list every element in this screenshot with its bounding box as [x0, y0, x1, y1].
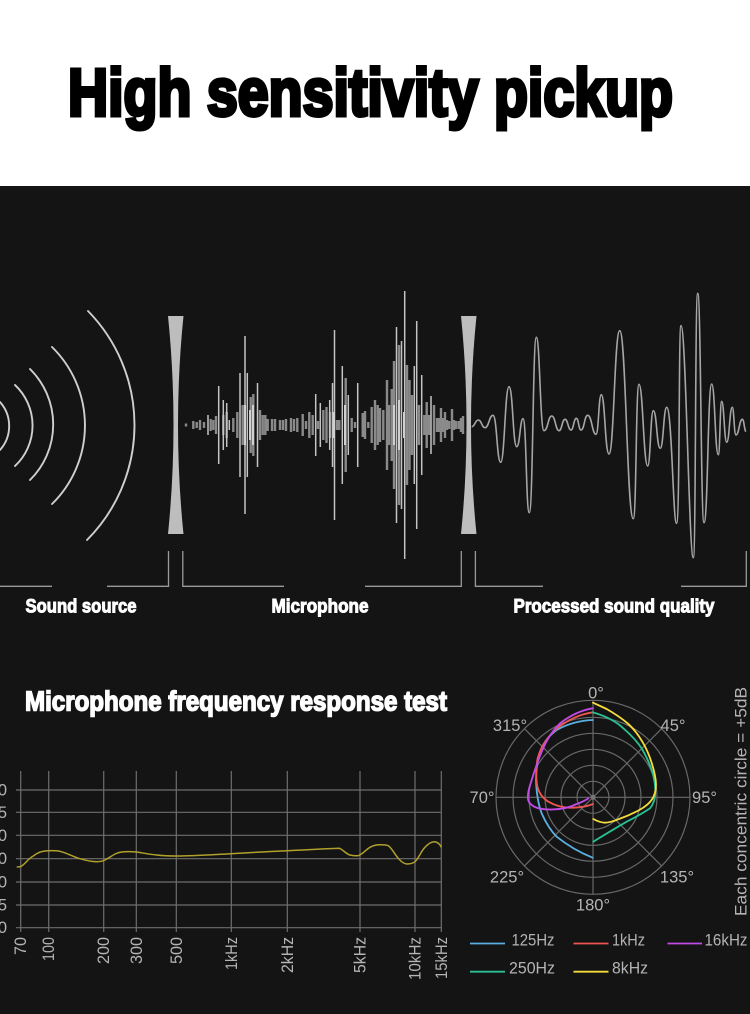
- polar angle labels: 135°: [660, 868, 694, 886]
- polar angle labels: 225°: [490, 868, 524, 886]
- y axis labels: [0, 782, 7, 937]
- polar angle labels: 70°: [470, 789, 494, 807]
- x axis labels: 70: [12, 937, 30, 955]
- bracket: sound source: [0, 551, 168, 586]
- x axis labels: 15kHz: [433, 937, 451, 979]
- polar angle labels: 95°: [692, 789, 717, 807]
- x axis labels: 10kHz: [406, 937, 424, 980]
- polar scale note: Each concentric circle = +5dB: [732, 687, 750, 916]
- label: microphone: Microphone: [272, 595, 369, 617]
- processed sound wave: [472, 293, 746, 558]
- x axis labels: 300: [128, 937, 146, 964]
- bracket: microphone: [183, 551, 461, 586]
- chart: frequency response: [0, 771, 451, 980]
- x axis labels: [12, 937, 451, 980]
- legend: 8kHz: [612, 960, 648, 978]
- raw sound waveform: [186, 291, 463, 559]
- legend: 250Hz: [509, 960, 555, 978]
- response curve: [17, 842, 441, 867]
- x axis labels: 100: [40, 937, 58, 961]
- x axis labels: 1kHz: [223, 937, 241, 970]
- x axis labels: 2kHz: [279, 937, 297, 973]
- legend: [470, 932, 748, 978]
- legend: 16kHz: [704, 932, 748, 950]
- polar angle labels: 315°: [493, 717, 527, 735]
- polar angle labels: 0°: [588, 684, 604, 702]
- x axis labels: 200: [95, 937, 113, 964]
- label: processed sound quality: Processed sound quality: [514, 595, 715, 617]
- x axis labels: 500: [168, 937, 186, 964]
- polar angle labels: 180°: [576, 896, 610, 914]
- chart: polar pattern: [470, 684, 717, 914]
- bracket: processed sound: [475, 551, 746, 586]
- icon: sound source waves: [0, 311, 134, 540]
- legend: 1kHz: [612, 932, 645, 950]
- x axis labels: 5kHz: [352, 937, 370, 973]
- label: sound source: Sound source: [26, 595, 137, 617]
- heading: frequency response test: Microphone frequency response test: [25, 685, 447, 716]
- polar angle labels: [470, 684, 717, 914]
- polar angle labels: 45°: [661, 717, 685, 735]
- icon: left microphone lens: [168, 316, 184, 534]
- legend: 125Hz: [512, 932, 554, 950]
- icon: right microphone lens: [461, 316, 476, 534]
- polar curves: [528, 703, 656, 858]
